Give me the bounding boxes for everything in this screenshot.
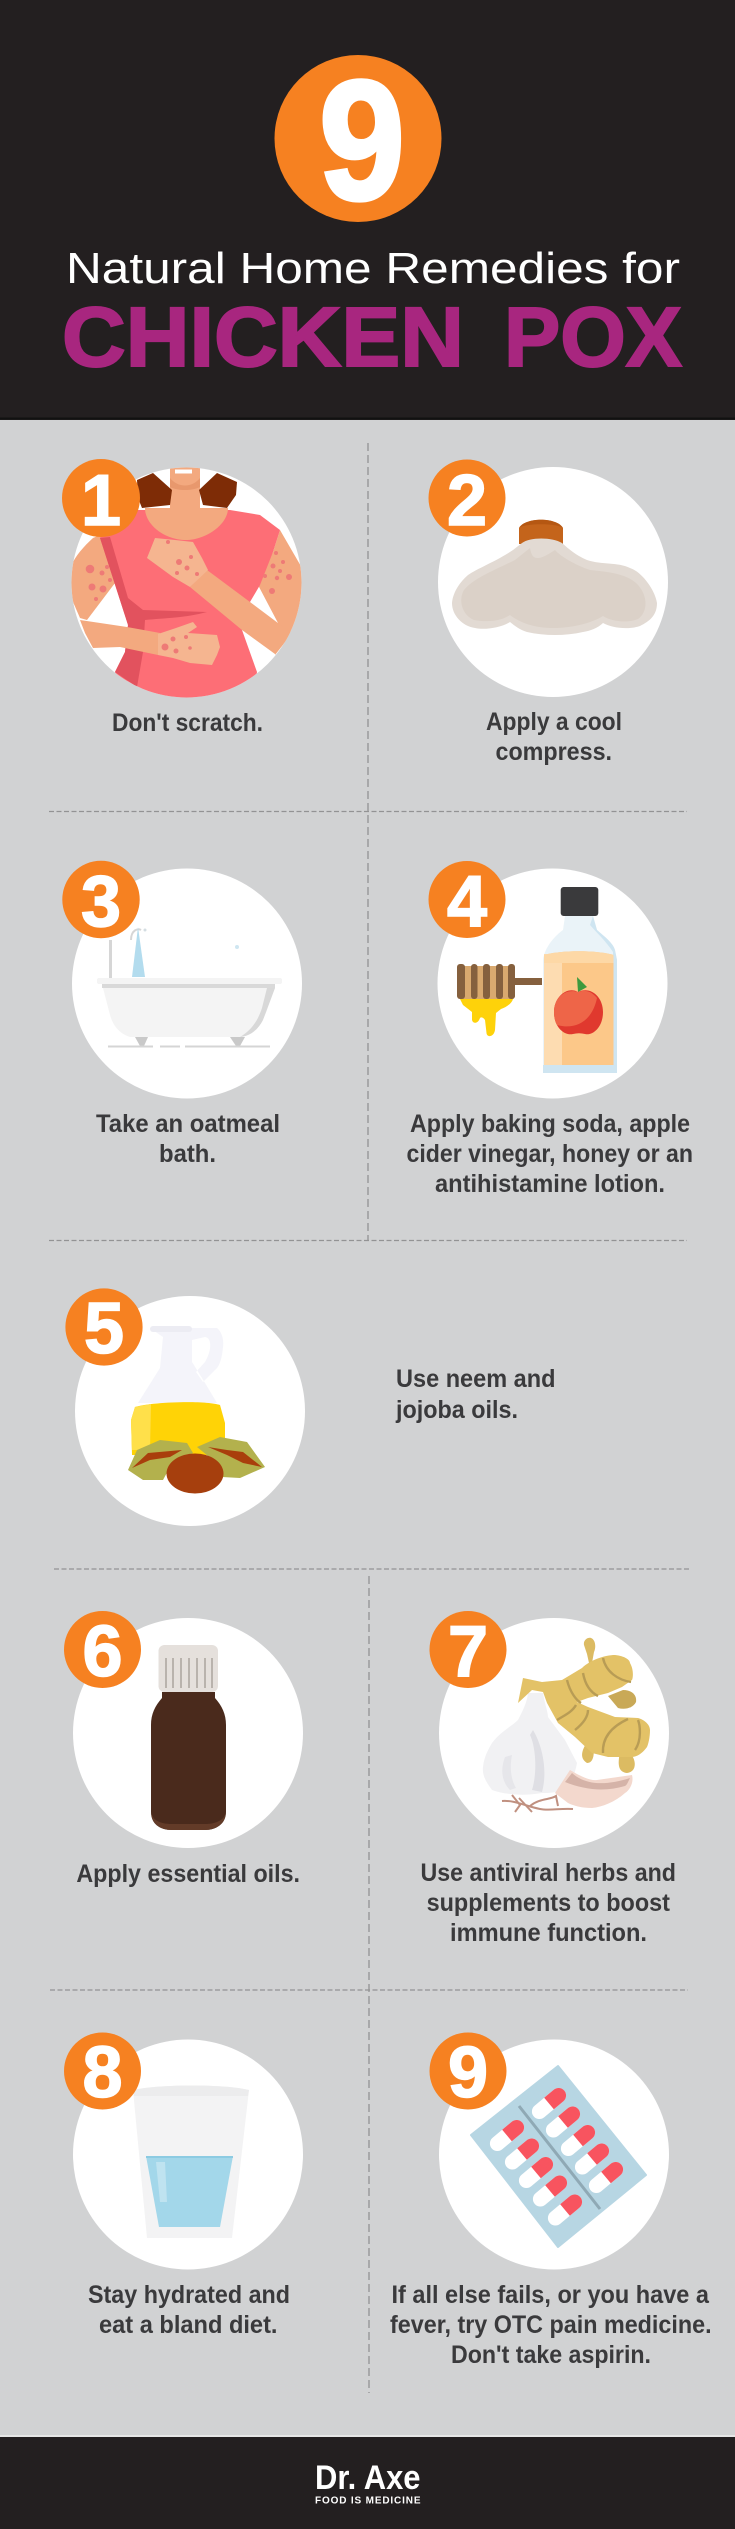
number badge 7	[430, 1611, 506, 1692]
icon: woman with rash	[70, 466, 302, 710]
panel: remedy 6	[64, 1611, 303, 1888]
number badge 4	[428, 861, 506, 942]
caption 9: fever, try OTC pain medicine.	[390, 2311, 712, 2339]
caption 2	[486, 708, 622, 766]
caption 1: Don't scratch.	[112, 709, 263, 737]
caption 4: antihistamine lotion.	[435, 1170, 665, 1198]
icon: essential oil bottle	[73, 1618, 303, 1848]
panel: remedy 2	[428, 460, 668, 766]
panel: remedy 8	[64, 2032, 303, 2339]
number badge 3	[62, 861, 140, 942]
panel: remedy 9	[390, 2032, 712, 2369]
caption 4: cider vinegar, honey or an	[406, 1140, 693, 1168]
number badge 1	[62, 459, 140, 541]
big number badge	[274, 46, 442, 236]
caption 3: bath.	[159, 1140, 216, 1168]
icon: blister pack of pills	[439, 2040, 669, 2270]
panel: remedy 7	[420, 1611, 676, 1947]
caption 5	[395, 1365, 556, 1424]
number badge 8	[64, 2032, 141, 2113]
caption 7: Use antiviral herbs and	[420, 1859, 676, 1887]
icon: oil jug and nuts	[75, 1296, 305, 1526]
panel: remedy 5	[65, 1288, 556, 1526]
number badge 6	[64, 1611, 141, 1692]
header banner	[0, 0, 735, 420]
title line 1: Natural Home Remedies for	[66, 244, 680, 293]
number badge 9	[430, 2032, 506, 2113]
caption 9	[390, 2281, 712, 2369]
logo: Dr. Axe: Dr. Axe	[315, 2459, 420, 2497]
icon: cool compress	[438, 467, 668, 697]
title line 2: CHICKEN	[62, 290, 464, 384]
number badge 4: 4	[447, 862, 487, 942]
caption 8: eat a bland diet.	[99, 2311, 278, 2339]
panel: remedy 3	[62, 861, 302, 1168]
caption 4: Apply baking soda, apple	[410, 1110, 690, 1138]
icon: bathtub	[72, 868, 302, 1098]
caption 2: Apply a cool	[486, 708, 622, 736]
icon: garlic and ginger	[439, 1618, 669, 1848]
number badge 5: 5	[84, 1289, 124, 1369]
number badge 6: 6	[82, 1612, 123, 1692]
number badge 8: 8	[82, 2033, 123, 2113]
caption 8: Stay hydrated and	[88, 2281, 290, 2309]
caption 6: Apply essential oils.	[76, 1860, 300, 1888]
caption 7: supplements to boost	[427, 1889, 671, 1917]
icon: vinegar bottle and honey dipper	[438, 868, 668, 1098]
icon: glass of water	[73, 2040, 303, 2270]
caption 5: Use neem and	[396, 1365, 556, 1393]
caption 4	[406, 1110, 693, 1198]
number badge 5	[65, 1288, 143, 1369]
panel: remedy 1	[62, 459, 302, 737]
number badge 2: 2	[447, 461, 487, 541]
caption 8	[88, 2281, 290, 2339]
caption 9: Don't take aspirin.	[451, 2341, 651, 2369]
number badge 2	[428, 460, 506, 541]
number badge 9: 9	[448, 2033, 488, 2113]
footer bar	[0, 2435, 735, 2529]
number badge 7: 7	[448, 1612, 488, 1692]
caption 3	[96, 1110, 280, 1168]
number badge 1: 1	[81, 461, 121, 541]
caption 7	[420, 1859, 676, 1947]
big number badge: 9	[319, 46, 405, 236]
caption 9: If all else fails, or you have a	[392, 2281, 710, 2309]
title line 2	[62, 290, 682, 384]
panel: remedy 4	[406, 861, 693, 1198]
caption 2: compress.	[496, 738, 612, 766]
title line 2: POX	[504, 290, 682, 384]
number badge 3: 3	[81, 862, 121, 942]
logo tagline: FOOD IS MEDICINE	[315, 2496, 421, 2506]
caption 3: Take an oatmeal	[96, 1110, 280, 1138]
caption 7: immune function.	[450, 1919, 647, 1947]
caption 5: jojoba oils.	[395, 1396, 518, 1424]
